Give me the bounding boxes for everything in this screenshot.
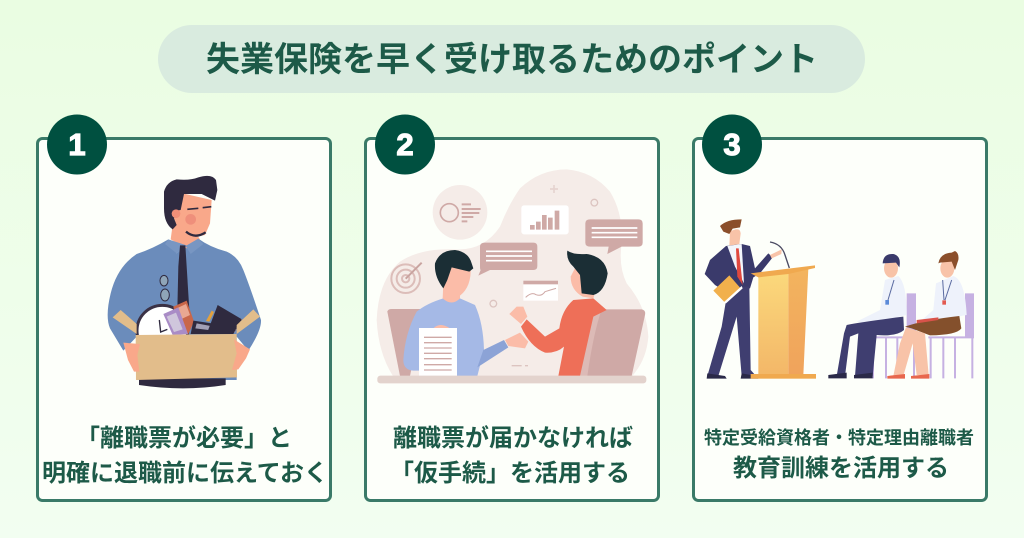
attendee woman — [887, 251, 967, 379]
illustration: two people talking — [377, 169, 648, 383]
title: 失業保険を早く受け取るためのポイント — [206, 41, 818, 79]
text: point 3 — [704, 427, 974, 482]
target icon — [391, 263, 422, 293]
panel: point 1 — [38, 114, 330, 500]
text: point 1: 明確に退職前に伝えておく — [42, 460, 328, 487]
speaker — [705, 219, 782, 379]
podium — [751, 265, 816, 379]
panel: point 3 — [694, 114, 986, 500]
badge: 3 — [702, 114, 762, 174]
illustration: seminar speaker and audience — [705, 219, 974, 379]
text: point 1 — [42, 424, 328, 487]
badge: 2 — [375, 114, 435, 174]
badge: 1 — [47, 114, 107, 174]
table — [377, 376, 646, 383]
chart icon — [440, 204, 481, 222]
microphone — [770, 242, 789, 268]
attendee man — [828, 254, 907, 378]
text: point 3: 特定受給資格者・特定理由離職者 — [704, 427, 974, 448]
illustration: man holding box — [108, 176, 261, 388]
text: point 3: 教育訓練を活用する — [733, 455, 949, 482]
text: point 1: 「離職票が必要」と — [76, 424, 292, 452]
chairs — [387, 309, 423, 376]
badge: 2: 2 — [396, 127, 414, 162]
badge: 3: 3 — [723, 127, 741, 162]
speech bubble left — [478, 243, 537, 276]
badge: 1: 1 — [68, 127, 86, 162]
speech bubble right — [585, 219, 643, 254]
man right — [521, 298, 607, 376]
chair 2 — [928, 293, 974, 378]
chair 1 — [870, 293, 917, 378]
trend card — [523, 281, 558, 301]
text: point 2: 離職票が届かなければ — [393, 424, 633, 452]
text: point 2: 「仮手続」を活用する — [390, 460, 630, 487]
panel: point 2 — [366, 114, 658, 500]
man left — [403, 298, 484, 376]
bar chart card — [521, 205, 569, 234]
text: point 2 — [390, 424, 633, 487]
title — [158, 25, 865, 93]
